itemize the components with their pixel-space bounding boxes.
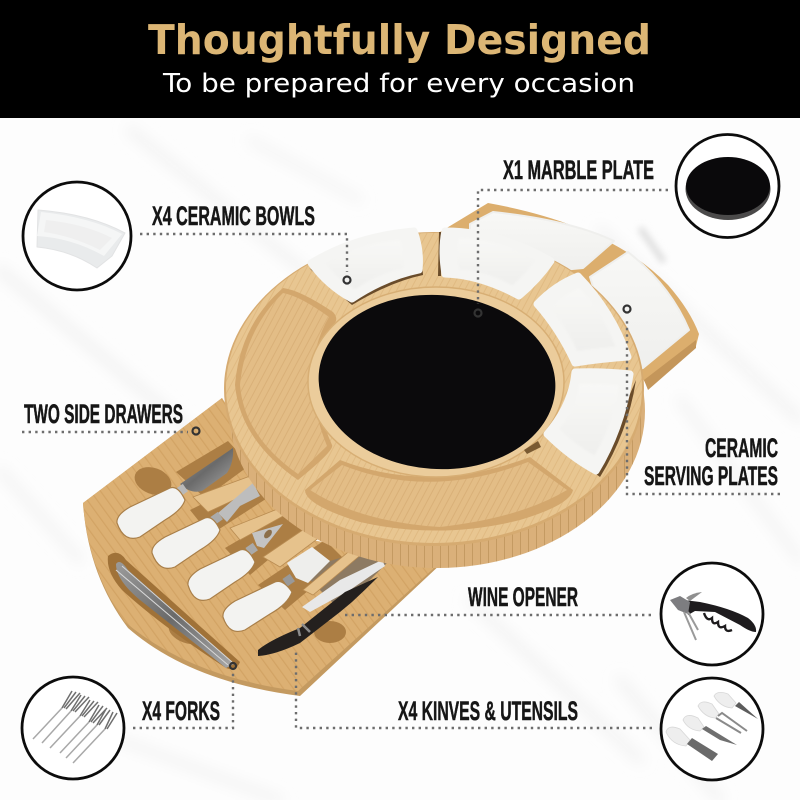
callout: ceramic bowls <box>23 182 350 290</box>
callout: marble plate: X1 MARBLE PLATE <box>503 155 654 185</box>
callout: knives and utensils: X4 KINVES & UTENSILS <box>398 696 578 726</box>
callout: two side drawers: TWO SIDE DRAWERS <box>24 399 183 429</box>
bottom compartment <box>305 457 573 531</box>
slats <box>193 475 363 595</box>
header banner <box>0 0 800 118</box>
bowl 1 <box>309 231 423 305</box>
callout: ceramic serving plates <box>624 306 780 494</box>
callout: knives and utensils <box>296 650 763 780</box>
callout: wine opener <box>345 563 763 665</box>
callout: ceramic bowls: X4 CERAMIC BOWLS <box>152 201 315 231</box>
icon: forks <box>33 691 117 763</box>
callout: forks: X4 FORKS <box>142 696 220 726</box>
callout: two side drawers <box>22 399 200 434</box>
left side drawer with utensils <box>83 398 443 696</box>
callout: marble plate <box>474 134 779 316</box>
icon: four utensils <box>666 692 758 761</box>
fork slot with forks <box>108 553 240 669</box>
wine opener in drawer <box>258 560 385 656</box>
left compartment <box>235 288 336 480</box>
callout: forks <box>22 663 236 779</box>
right side drawer with ceramic plates <box>440 203 699 390</box>
flat cheese blade <box>223 547 330 631</box>
main round board <box>224 231 645 568</box>
subtitle: To be prepared for every occasion <box>162 69 635 99</box>
finger holes and slots <box>131 441 390 649</box>
plate A <box>470 212 614 272</box>
icon: black marble plate <box>686 157 770 220</box>
icon: corkscrew <box>670 592 756 640</box>
cheese knife <box>117 448 233 538</box>
black marble plate <box>313 287 561 477</box>
slotted knife <box>188 524 283 600</box>
icon: ceramic bowl <box>37 210 125 268</box>
title: Thoughtfully Designed <box>148 16 651 64</box>
bowl 3 <box>537 276 628 363</box>
fork utensil <box>152 483 260 568</box>
bowl 2 <box>438 231 551 296</box>
bowl 4 <box>547 372 636 477</box>
callout: wine opener: WINE OPENER <box>468 582 578 612</box>
plate B <box>590 252 689 372</box>
inner ring <box>308 287 564 477</box>
